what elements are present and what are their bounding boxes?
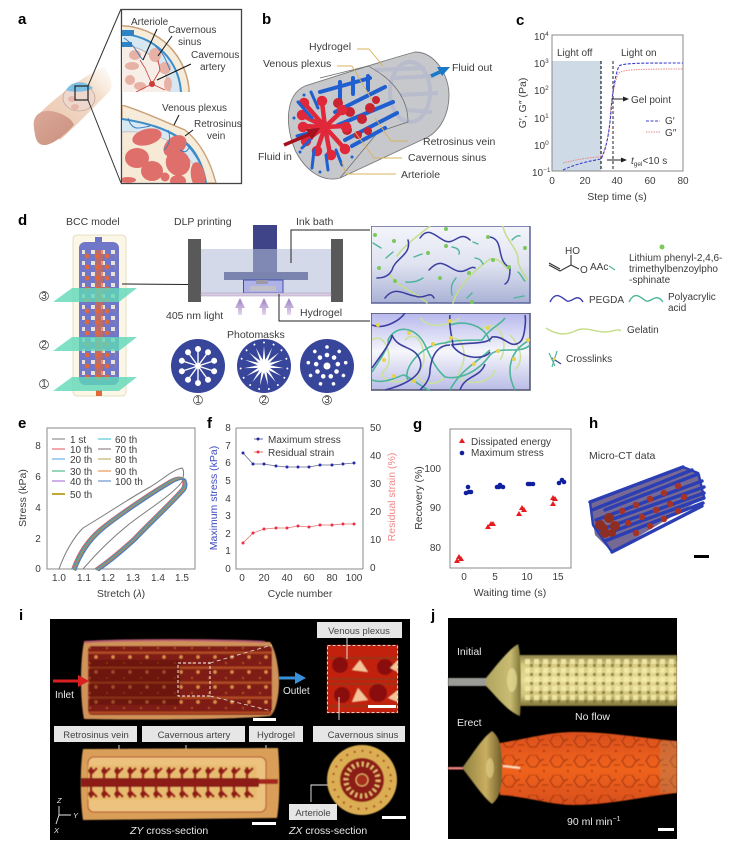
x ticks (461, 572, 564, 583)
y ticks: 8 (35, 441, 41, 452)
left ticks: 3 (225, 511, 231, 522)
label: cavernous sinus (313, 726, 405, 742)
legend (254, 435, 341, 459)
y tick labels: 3 (545, 58, 549, 65)
heading c: c (516, 12, 524, 29)
inset labels and pointers: Retrosinus (194, 119, 242, 130)
inset labels and pointers: Cavernous (168, 25, 216, 36)
y tick labels: 0 (545, 140, 549, 147)
y axis title: Stress (kPa) (17, 469, 29, 527)
legend (646, 116, 677, 139)
heading g: g (413, 416, 422, 433)
blue venous bars (320, 76, 397, 146)
captions (129, 825, 367, 837)
label: venous plexus: Venous plexus (328, 626, 390, 637)
y tick labels: 1 (545, 113, 549, 120)
annotation: t gel: t (631, 156, 635, 167)
x ticks: 5 (492, 572, 498, 583)
y tick labels (532, 31, 551, 179)
legend: 80 th (115, 455, 137, 466)
captions: Initial (457, 646, 482, 658)
label: arteriole (289, 804, 337, 820)
light on label: Light on (621, 48, 657, 59)
right ticks: 10 (370, 535, 382, 546)
blue radial spokes (297, 92, 342, 170)
x ticks: 60 (303, 573, 315, 584)
legend: G″ (665, 128, 677, 139)
left ticks: 4 (225, 494, 231, 505)
right ticks (370, 423, 382, 574)
outlet arrow: Outlet (283, 686, 310, 697)
labels: Cavernous sinus (408, 152, 486, 164)
x ticks: 1.2 (101, 573, 115, 584)
arrow: fluid in (284, 128, 320, 145)
printer schematic: Ink bath (296, 216, 334, 228)
BCC model: 1 (41, 379, 47, 390)
hysteresis curve: 1st cycle (59, 468, 184, 569)
zoomed inset photo (327, 645, 398, 713)
x ticks: 10 (521, 572, 533, 583)
y ticks: 4 (35, 503, 41, 514)
inset labels and pointers: vein (207, 131, 225, 142)
panel a: anatomy (18, 9, 242, 191)
left ticks: 5 (225, 476, 231, 487)
illustration: penis with cross-section (34, 67, 111, 145)
right axis title: Residual strain (%) (386, 453, 398, 541)
x axis title: Waiting time (s) (474, 587, 546, 599)
axes glyph: X (53, 826, 60, 835)
photomasks: 2 (261, 395, 267, 406)
x ticks (239, 573, 363, 584)
captions: ZX cross-section (288, 825, 367, 837)
inset labels and pointers: Venous plexus (162, 103, 227, 114)
panel h: micro-CT (589, 415, 709, 558)
x ticks: 1.4 (151, 573, 165, 584)
right ticks: 0 (370, 563, 376, 574)
red radial arteriole star (299, 98, 349, 158)
labels: Hydrogel (309, 41, 351, 53)
scale bars (252, 718, 406, 825)
scale bar (658, 828, 674, 831)
connector line (122, 284, 245, 285)
x ticks: 1.1 (77, 573, 91, 584)
lattice render (590, 467, 705, 552)
chemistry legend: HO (565, 246, 580, 257)
zoom connector lines (88, 9, 121, 183)
annotation: gel point (612, 95, 671, 106)
axes (47, 428, 195, 569)
label: arteriole: Arteriole (295, 808, 331, 819)
icon: PEGDA (550, 296, 583, 302)
panel e: stress stretch chart (17, 415, 195, 600)
panel j: actuated model photographs (430, 607, 677, 839)
legend (52, 435, 143, 501)
annotation: gel point: Gel point (631, 95, 671, 106)
series: residual strain (242, 522, 356, 544)
y ticks: 80 (430, 543, 441, 554)
axis titles: Step time (s) (587, 191, 647, 203)
BCC model: BCC model (66, 216, 120, 228)
annotation: t gel: gel (634, 161, 643, 168)
label: hydrogel (249, 726, 303, 742)
outlet arrow (279, 672, 310, 697)
series: maximum stress (464, 478, 566, 495)
ZX cross-section photo (327, 745, 397, 815)
phase labels: Light off (557, 48, 593, 59)
axes glyph (53, 796, 79, 835)
labels: Fluid out (452, 62, 492, 74)
phase dashed lines (600, 61, 602, 171)
legend: Dissipated energy (471, 437, 551, 448)
heading f: f (207, 415, 213, 432)
arrow: fluid out (431, 67, 450, 76)
caption: Micro-CT data (589, 450, 655, 462)
y tick labels: 4 (545, 31, 549, 38)
curve G'' (563, 69, 683, 163)
ghost lattice (375, 62, 438, 122)
y tick labels: 10 (534, 86, 545, 97)
legend: 60 th (115, 435, 137, 446)
mask 3 (300, 339, 354, 393)
annotation: t gel: <10 s (642, 156, 667, 167)
inset labels and pointers: artery (200, 62, 226, 73)
label pointers (119, 638, 371, 802)
left ticks: 7 (225, 441, 231, 452)
BCC model: 3 (41, 291, 47, 302)
left axis title: Maximum stress (kPa) (208, 446, 220, 550)
inset top: arteriole and sinus (122, 25, 190, 92)
legend: 70 th (115, 445, 137, 456)
inset labels and pointers: sinus (178, 37, 201, 48)
y ticks (424, 464, 441, 554)
photomasks: 3 (324, 395, 330, 406)
legend: Maximum stress (268, 435, 341, 446)
y axis title: Recovery (%) (413, 466, 425, 530)
bottom photo: ZY section (81, 748, 279, 820)
y ticks: 90 (430, 503, 441, 514)
hysteresis curves: later cycles (72, 477, 187, 571)
captions (457, 646, 621, 828)
label: cavernous artery: Cavernous artery (158, 730, 231, 741)
heading h: h (589, 415, 598, 432)
labels: Retrosinus vein (423, 136, 496, 148)
printer schematic: DLP printing (174, 216, 232, 228)
labels: Venous plexus (263, 58, 331, 70)
chemistry legend: Polyacrylic (668, 292, 716, 303)
series: maximum stress (242, 452, 356, 468)
x tick labels: 80 (677, 176, 689, 187)
icon: gelatin (546, 328, 621, 334)
x tick labels: 0 (549, 176, 555, 187)
black panel (50, 619, 410, 840)
chemistry legend: PEGDA (589, 295, 624, 306)
top photo (81, 640, 279, 720)
label: cavernous sinus: Cavernous sinus (328, 730, 399, 741)
legend: 1 st (70, 435, 86, 446)
heading d: d (18, 212, 27, 229)
axes glyph: Z (56, 796, 62, 805)
left ticks: 1 (225, 546, 231, 557)
label: venous plexus (317, 622, 402, 638)
inlet arrow: Inlet (55, 690, 74, 701)
chemistry legend: Lithium phenyl-2,4,6- (629, 253, 722, 264)
inlet arrow (53, 675, 89, 701)
legend: 20 th (70, 455, 92, 466)
y ticks: 0 (35, 564, 41, 575)
label: retrosinus vein: Retrosinus vein (63, 730, 129, 741)
x axis title: Cycle number (268, 588, 333, 600)
y ticks (35, 441, 41, 575)
photomasks: 1 (195, 395, 201, 406)
legend: 50 th (70, 490, 92, 501)
right ticks: 20 (370, 507, 382, 518)
y tick labels: 10 (534, 32, 545, 43)
annotation: t gel (607, 156, 667, 168)
captions: −1 (613, 816, 621, 823)
labels: Arteriole (401, 169, 440, 181)
x ticks: 0 (239, 573, 245, 584)
x ticks: 80 (326, 573, 338, 584)
erect state model (448, 731, 677, 805)
slice planes (53, 288, 137, 302)
icon: polyacrylic acid (629, 296, 663, 302)
curve G' (563, 63, 683, 170)
x tick labels (549, 176, 689, 187)
axes (450, 429, 571, 568)
black panel (448, 618, 677, 839)
left ticks (225, 423, 231, 575)
ink network: before curing (371, 226, 531, 304)
chemistry legend: Crosslinks (566, 354, 612, 365)
x tick labels: 60 (644, 176, 656, 187)
panel c: rheology chart (516, 12, 689, 203)
y tick labels: 10 (532, 168, 543, 179)
legend: 90 th (115, 467, 137, 478)
inset labels and pointers: Cavernous (191, 50, 239, 61)
left ticks: 2 (225, 529, 231, 540)
y tick labels: −1 (543, 167, 551, 174)
captions: 90 ml min (567, 816, 613, 828)
scale bar (694, 555, 709, 558)
heading b: b (262, 11, 271, 28)
captions: Erect (457, 717, 482, 729)
heading i: i (19, 607, 23, 624)
captions: No flow (575, 711, 610, 723)
legend: 10 th (70, 445, 92, 456)
photomasks (171, 329, 354, 406)
right ticks: 40 (370, 451, 382, 462)
leader lines (337, 49, 408, 174)
right ticks: 30 (370, 479, 382, 490)
heading a: a (18, 11, 27, 28)
y tick labels: 10 (534, 59, 545, 70)
printer schematic (166, 216, 370, 322)
chemistry legend (546, 244, 722, 367)
y tick labels: 10 (534, 114, 545, 125)
hydrogel cylinder (288, 52, 449, 179)
left ticks: 8 (225, 423, 231, 434)
icon: AAc molecule (549, 255, 579, 271)
cut-away section lines (320, 66, 408, 178)
inset bottom: venous plexus (122, 105, 217, 183)
heading j: j (430, 607, 435, 624)
legend: 100 th (115, 477, 143, 488)
legend (459, 437, 551, 459)
x ticks: 1.0 (52, 573, 66, 584)
inset labels and pointers (131, 17, 242, 142)
x ticks: 40 (281, 573, 293, 584)
labels (258, 41, 496, 181)
x ticks: 1.3 (126, 573, 140, 584)
chemistry legend: AAc (590, 262, 608, 273)
BCC model: 2 (41, 340, 47, 351)
label: hydrogel: Hydrogel (257, 730, 295, 741)
BCC model (40, 216, 137, 396)
y tick labels: 2 (545, 85, 549, 92)
icon: crosslinks (549, 351, 561, 367)
chemistry legend: Gelatin (627, 325, 659, 336)
left ticks: 0 (225, 564, 231, 575)
x axis title: Stretch (λ) (97, 588, 145, 600)
y ticks: 2 (35, 534, 41, 545)
photomasks: Photomasks (227, 329, 285, 341)
light off shading (552, 61, 601, 171)
x ticks: 1.5 (175, 573, 189, 584)
legend: 30 th (70, 467, 92, 478)
x ticks: 0 (461, 572, 467, 583)
y tick labels: 10 (534, 141, 545, 152)
red cavernous blobs (333, 96, 380, 139)
label: cavernous artery (142, 726, 245, 742)
series: dissipated energy (454, 495, 558, 563)
heading e: e (18, 415, 26, 432)
right ticks: 50 (370, 423, 382, 434)
x ticks: 100 (346, 573, 363, 584)
mask 1 (171, 339, 225, 393)
y ticks: 100 (424, 464, 441, 475)
panel g: recovery chart (413, 416, 571, 599)
x ticks (52, 573, 189, 584)
chemistry legend: O (580, 265, 588, 276)
chemistry legend: trimethylbenzoylpho (629, 264, 718, 275)
initial state model (448, 644, 677, 716)
legend: 40 th (70, 477, 92, 488)
x tick labels: 20 (579, 176, 591, 187)
printer schematic: Hydrogel (300, 307, 342, 319)
chemistry legend: acid (668, 303, 686, 314)
x tick labels: 40 (611, 176, 623, 187)
panel i: photographs (19, 607, 410, 840)
label: retrosinus vein (54, 726, 137, 742)
axes (236, 428, 363, 569)
panel f: cyclic chart (207, 415, 398, 600)
y ticks: 6 (35, 472, 41, 483)
left ticks: 6 (225, 458, 231, 469)
axes glyph: Y (73, 811, 79, 820)
printer schematic: 405 nm light (166, 310, 223, 322)
panel d: DLP printing (18, 212, 722, 406)
axes box (552, 35, 683, 171)
ink network: after curing (371, 313, 531, 391)
panel b: hydrogel model (258, 11, 496, 181)
chemistry legend: -sphinate (629, 275, 671, 286)
captions: ZY cross-section (129, 825, 208, 837)
inset labels and pointers: Arteriole (131, 17, 169, 28)
y axis title: G′, G″ (Pa) (517, 78, 529, 128)
x ticks: 15 (552, 572, 564, 583)
legend: G′ (665, 116, 675, 127)
inset frame (122, 10, 242, 184)
legend: Maximum stress (471, 448, 544, 459)
mask 2 (237, 339, 291, 393)
legend: Residual strain (268, 448, 334, 459)
x ticks: 20 (258, 573, 270, 584)
labels: Fluid in (258, 151, 292, 163)
